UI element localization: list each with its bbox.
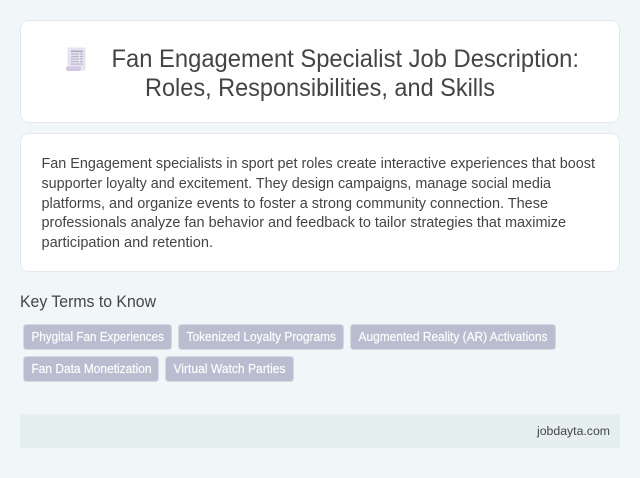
tag list [24, 324, 556, 382]
text block: description: participation and retention. [42, 235, 213, 251]
text block: description: Fan Engagement specialists in sport pet roles create interactive experiences that boost [42, 156, 595, 172]
tag: tokenized loyalty programs [178, 324, 344, 350]
text block: description: professionals analyze fan behavior and feedback to tailor strategies that maximize [42, 215, 566, 231]
icon: document scroll [66, 48, 86, 71]
tag: augmented reality activations [350, 324, 556, 350]
footer [20, 414, 620, 448]
panel: description [20, 134, 620, 272]
tag: virtual watch parties: Virtual Watch Parties [174, 362, 286, 376]
tag: virtual watch parties [166, 356, 294, 382]
title: Roles, Responsibilities, and Skills [145, 75, 495, 102]
heading: key terms: Key Terms to Know [20, 293, 156, 311]
title [112, 46, 579, 102]
tag: augmented reality activations: Augmented Reality (AR) Activations [358, 330, 548, 344]
footer source text: jobdayta.com [536, 424, 610, 438]
tag: fan data monetization [24, 356, 158, 382]
title: Fan Engagement Specialist Job Description: [112, 46, 579, 73]
text block: description [42, 156, 595, 251]
panel: header [20, 20, 620, 122]
text block: description: supporter loyalty and excitement. They design campaigns, manage social media [42, 176, 552, 192]
tag: phygital fan experiences: Phygital Fan Experiences [32, 330, 164, 344]
tag: phygital fan experiences [24, 324, 172, 350]
tag: tokenized loyalty programs: Tokenized Loyalty Programs [186, 330, 336, 344]
text block: description: platforms, and organize events to foster a strong community connection. These [42, 196, 548, 212]
tag: fan data monetization: Fan Data Monetization [32, 362, 152, 376]
